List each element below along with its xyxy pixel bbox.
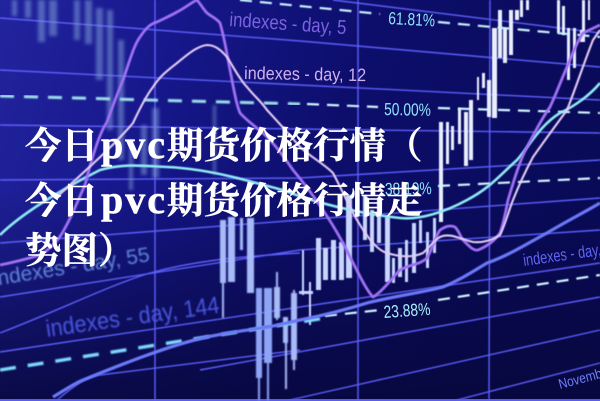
purple moving average, day 5 bbox=[0, 0, 600, 297]
faded candles upper left bbox=[12, 0, 216, 190]
label: 38.19%: 38.19% bbox=[385, 180, 432, 199]
cyan moving average bbox=[0, 83, 600, 235]
label: 23.88%: 23.88% bbox=[383, 300, 431, 322]
label: 50.00%: 50.00% bbox=[384, 101, 431, 120]
thick blue trend line bbox=[53, 203, 600, 397]
title: 势图） bbox=[25, 230, 134, 271]
label: indexes day 12: indexes - day, 12 bbox=[244, 63, 366, 85]
label: indexes day 144: indexes - day, 144 bbox=[44, 291, 221, 342]
label: 61.81%: 61.81% bbox=[388, 10, 436, 31]
title: 今日pvc期货价格行情走 bbox=[25, 177, 422, 222]
label: indexes day 5: indexes - day, 5 bbox=[229, 8, 347, 39]
candles middle bbox=[220, 217, 297, 400]
candles upper right bbox=[439, 0, 590, 222]
pink moving average, day 12 bbox=[57, 30, 600, 256]
title: 今日pvc期货价格行情（ bbox=[25, 122, 422, 167]
dashed fibonacci levels bbox=[240, 0, 600, 37]
